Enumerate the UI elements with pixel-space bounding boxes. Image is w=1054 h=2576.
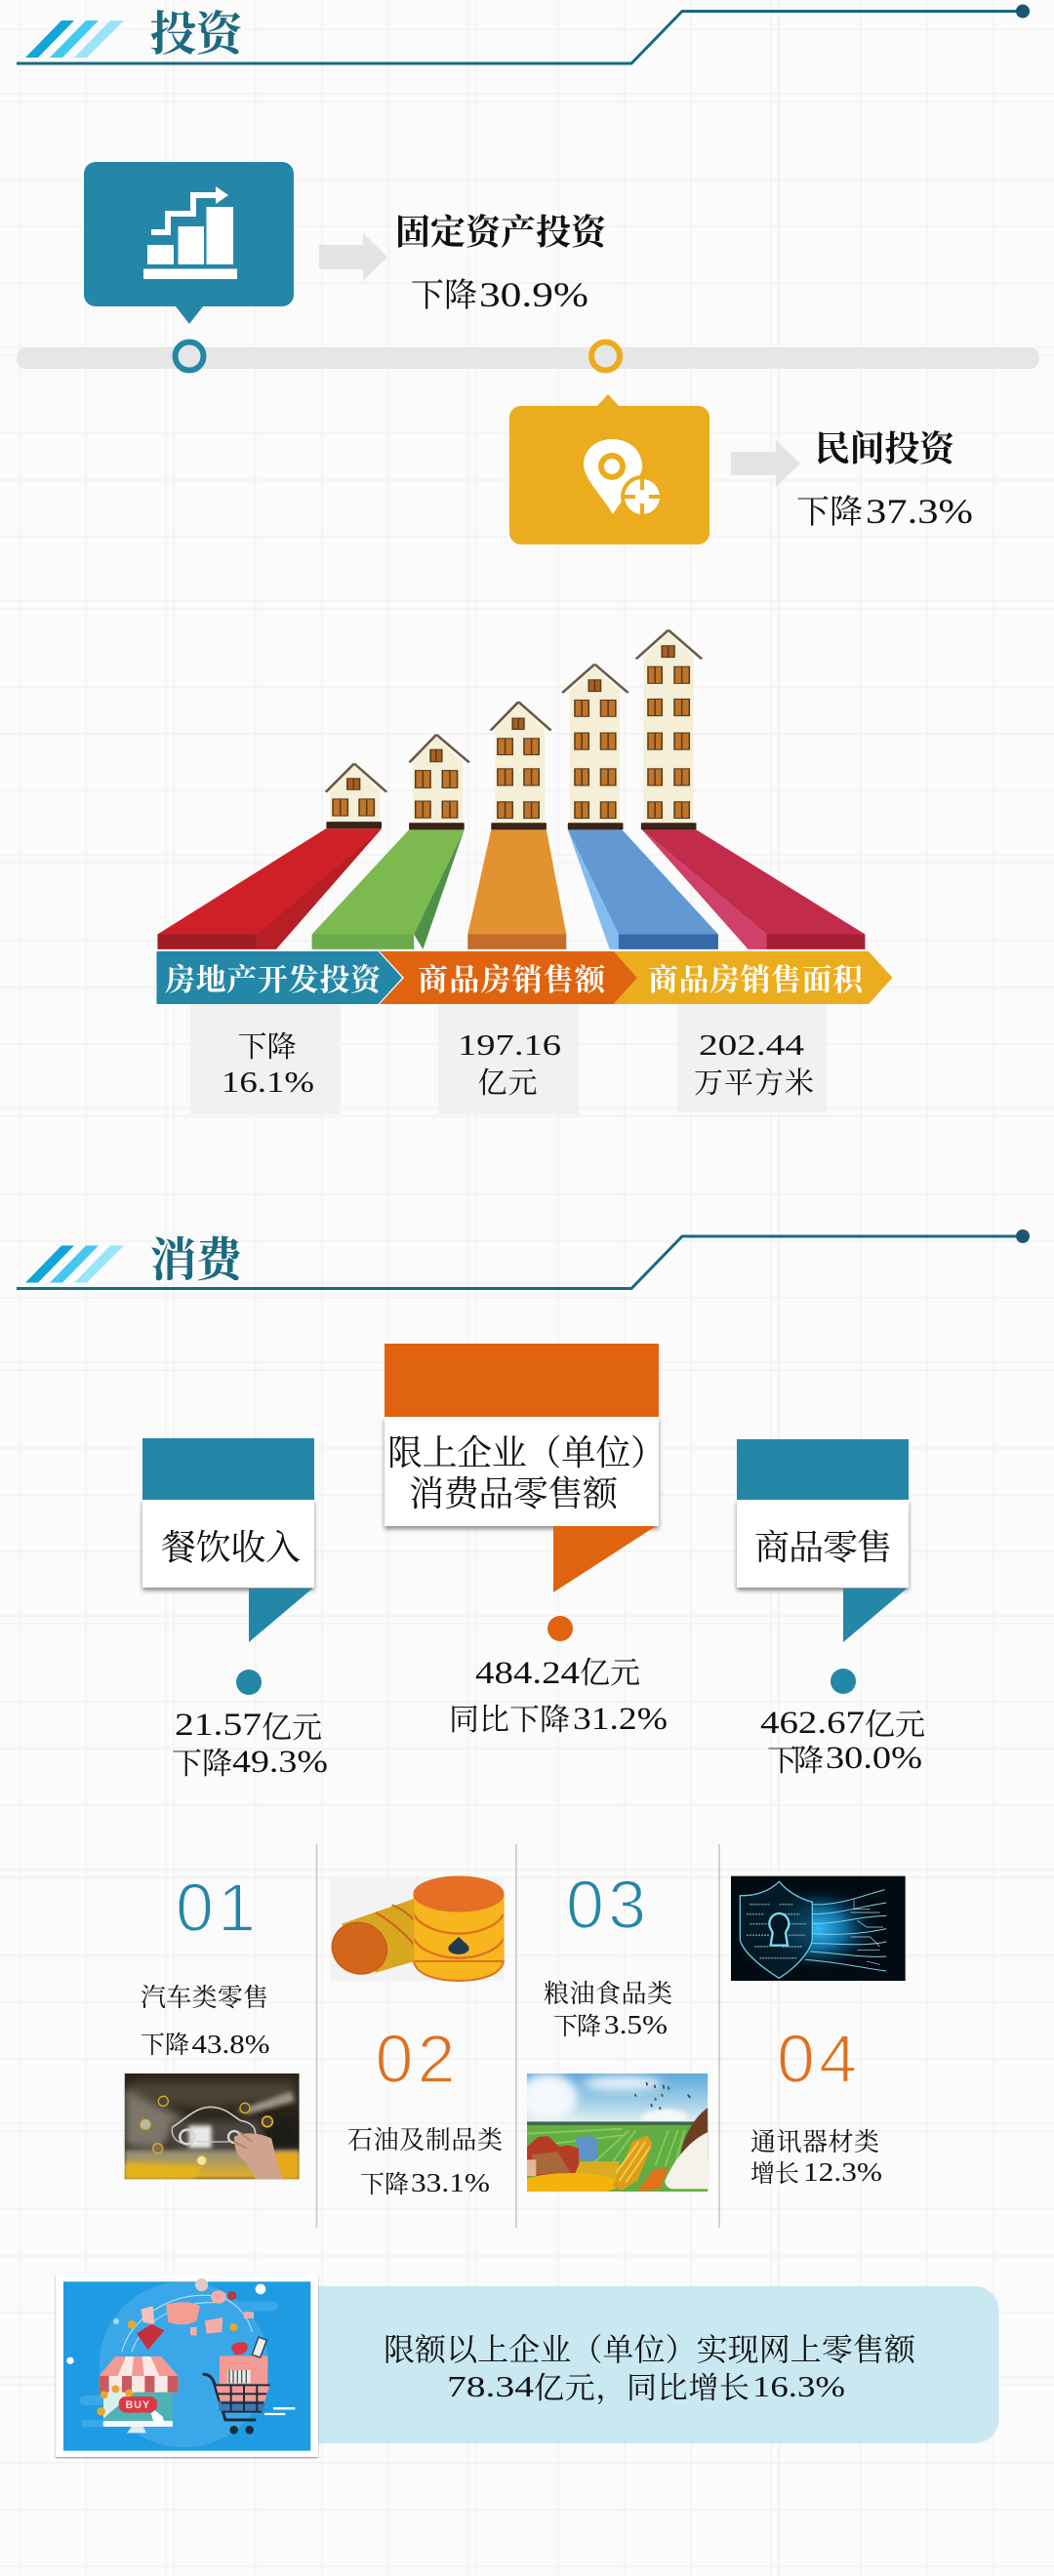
road crimson <box>642 829 865 949</box>
panel: private investment icon <box>509 394 709 544</box>
text block: fixed asset investment: 固定资产投资 <box>395 213 610 252</box>
text block: private investment <box>796 429 973 531</box>
shop with buy button: BUY <box>126 2399 150 2411</box>
chevron: commercial housing sales area: 商品房销售面积 <box>648 963 866 997</box>
section header: 投资: 投资 <box>150 9 247 60</box>
road red <box>157 828 382 949</box>
arrow <box>731 440 800 487</box>
card: retail sales above quota: 同比下降 <box>449 1703 570 1737</box>
text block: fixed asset investment: 下降 <box>411 277 477 314</box>
card: goods retail: 亿元 <box>865 1708 925 1742</box>
callout: online retail: 亿元，同比增长 <box>534 2371 750 2405</box>
chart: rising houses on coloured roads <box>157 630 865 949</box>
item 04: communication equipment: 04 <box>777 2021 857 2097</box>
image: digital security shield <box>731 1876 906 1981</box>
chevron: commercial housing sales value <box>380 951 637 1004</box>
value box: sales value <box>438 1004 579 1114</box>
section header: 消费: 消费 <box>150 1235 245 1286</box>
card: goods retail: 30.0% <box>826 1741 922 1776</box>
text block: fixed asset investment <box>395 213 610 314</box>
item 03: grain, oil and food: 3.5% <box>604 2010 668 2039</box>
road green <box>312 829 465 949</box>
value box: real estate decline: 16.1% <box>222 1065 314 1099</box>
item 02: petroleum products: 下降 <box>360 2171 409 2198</box>
card: catering revenue: 21.57 <box>175 1708 262 1743</box>
text block: private investment: 下降 <box>796 494 863 531</box>
item 01: auto retail: 43.8% <box>191 2030 269 2059</box>
road orange <box>467 829 566 949</box>
callout: online retail: 限额以上企业（单位）实现网上零售额 <box>384 2332 916 2367</box>
item 02: petroleum products: 石油及制品类 <box>347 2126 503 2154</box>
card: goods retail: 下降 <box>767 1744 824 1778</box>
house 3 <box>491 702 550 829</box>
value box: real estate decline: 下降 <box>238 1031 297 1064</box>
card: catering revenue: 亿元 <box>262 1711 322 1745</box>
card: catering revenue <box>142 1438 328 1781</box>
value box: sales value: 亿元 <box>478 1067 537 1100</box>
chevron: commercial housing sales area <box>614 951 892 1004</box>
text block: fixed asset investment: 30.9% <box>479 275 588 314</box>
card: retail sales above quota <box>385 1344 668 1737</box>
road blue <box>568 829 718 949</box>
chevron: real estate development investment: 房地产开发投资 <box>165 963 385 997</box>
chevron band: property labels <box>156 951 892 1004</box>
card: goods retail <box>737 1439 925 1778</box>
value box: sales area <box>677 1004 827 1112</box>
text block: private investment: 民间投资 <box>815 429 958 468</box>
section header: 消费 <box>17 1229 1030 1288</box>
card: retail sales above quota: 限上企业（单位） <box>387 1433 666 1472</box>
card: catering revenue: 餐饮收入 <box>161 1528 301 1567</box>
card: catering revenue: 下降 <box>172 1747 232 1781</box>
callout: online retail <box>318 2286 999 2443</box>
item 04: communication equipment: 增长 <box>750 2160 799 2188</box>
image: smart car photo <box>125 2073 300 2179</box>
item 01: auto retail <box>125 1870 300 2179</box>
item 04: communication equipment: 12.3% <box>803 2157 882 2187</box>
suitcase <box>166 2302 200 2324</box>
card: goods retail: 商品零售 <box>754 1528 892 1567</box>
item 02: petroleum products: 02 <box>375 2021 455 2097</box>
chevron: real estate development investment <box>156 951 402 1004</box>
house 5 <box>636 630 702 829</box>
card: retail sales above quota: 484.24 <box>475 1656 580 1691</box>
card: goods retail: 462.67 <box>760 1706 865 1741</box>
callout: online retail: 78.34 <box>447 2369 535 2403</box>
item 01: auto retail: 01 <box>176 1870 256 1946</box>
text block: private investment: 37.3% <box>866 492 973 531</box>
value box: sales value: 197.16 <box>458 1027 561 1062</box>
item 03: grain, oil and food <box>518 1867 708 2195</box>
arrow <box>319 233 387 281</box>
callout: online retail: 16.3% <box>752 2369 845 2403</box>
chevron: commercial housing sales value: 商品房销售额 <box>418 963 607 997</box>
image: oil barrels <box>324 1876 504 1982</box>
item 02: petroleum products <box>324 1876 504 2198</box>
timeline bar <box>17 342 1039 371</box>
item 01: auto retail: 汽车类零售 <box>141 1984 268 2012</box>
panel: fixed asset investment icon <box>84 162 294 324</box>
value box: real estate decline <box>190 1004 341 1114</box>
card: retail sales above quota: 消费品零售额 <box>409 1474 619 1513</box>
item 02: petroleum products: 33.1% <box>411 2168 490 2197</box>
house 4 <box>562 664 628 829</box>
value box: sales area: 202.44 <box>699 1027 805 1062</box>
shop with buy button <box>97 2356 178 2433</box>
column dividers <box>316 1844 719 2228</box>
item 01: auto retail: 下降 <box>141 2032 189 2059</box>
item 03: grain, oil and food: 粮油食品类 <box>544 1980 672 2008</box>
item 03: grain, oil and food: 下降 <box>553 2013 601 2040</box>
item 04: communication equipment <box>731 1876 906 2188</box>
card: retail sales above quota: 亿元 <box>580 1656 640 1690</box>
item 03: grain, oil and food: 03 <box>566 1867 646 1943</box>
house 2 <box>409 735 469 829</box>
card: catering revenue: 49.3% <box>232 1745 328 1780</box>
card: retail sales above quota: 31.2% <box>573 1702 668 1737</box>
image: online shopping illustration <box>56 2274 318 2457</box>
house 1 <box>326 763 386 828</box>
section header: 投资 <box>17 4 1030 63</box>
value box: sales area: 万平方米 <box>694 1067 814 1100</box>
image: farm field and grains <box>518 2073 708 2195</box>
item 04: communication equipment: 通讯器材类 <box>750 2128 879 2156</box>
cart with shopping bag <box>203 2337 295 2435</box>
